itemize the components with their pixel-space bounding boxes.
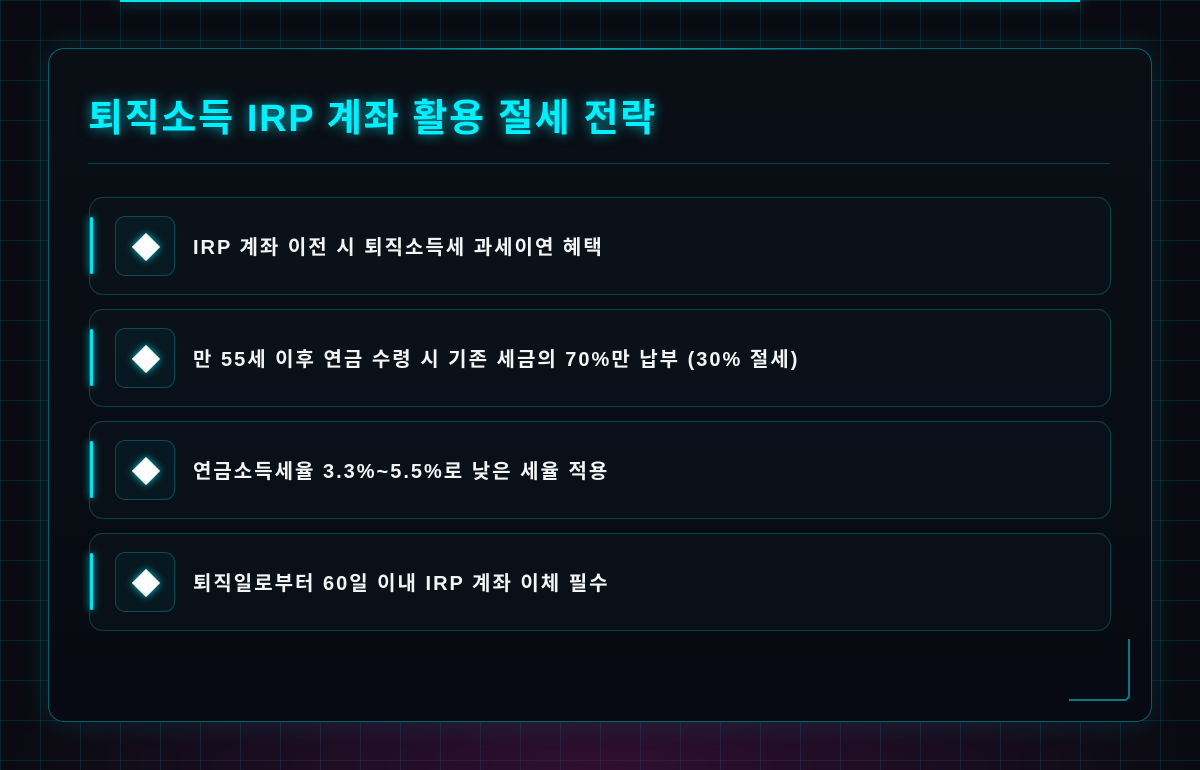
text 3: 연금소득세율 3.3%~5.5%로 낮은 세율 적용 [193,461,609,483]
item 1 [89,197,1111,295]
title: 퇴직소득 IRP 계좌 활용 절세 전략 [88,98,657,140]
icon: diamond [115,440,175,500]
item 2 [89,309,1111,407]
icon: diamond [115,216,175,276]
text 4: 퇴직일로부터 60일 이내 IRP 계좌 이체 필수 [193,573,610,595]
text 1: IRP 계좌 이전 시 퇴직소득세 과세이연 혜택 [193,237,604,259]
corner bracket [1069,639,1130,701]
text 2: 만 55세 이후 연금 수령 시 기존 세금의 70%만 납부 (30% 절세) [193,349,799,371]
item 4 [89,533,1111,631]
item 3 [89,421,1111,519]
icon: diamond [115,552,175,612]
icon: diamond [115,328,175,388]
